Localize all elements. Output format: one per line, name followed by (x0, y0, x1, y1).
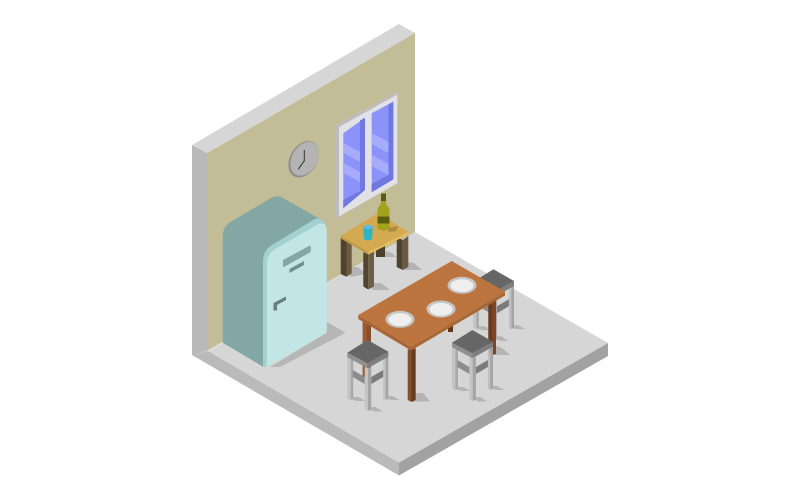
table edges (358, 315, 411, 350)
back leg (448, 320, 453, 332)
window pane: left (343, 118, 365, 208)
fridge shadow (270, 322, 346, 367)
window pane: right (372, 102, 393, 192)
front right stool (452, 330, 504, 402)
right leg (397, 236, 408, 270)
front leg (363, 251, 374, 290)
front left stool (347, 340, 400, 412)
fridge door (267, 223, 327, 367)
table top (341, 236, 368, 254)
fridge handle (274, 296, 286, 310)
side table (341, 194, 422, 290)
plate 2 (426, 300, 456, 318)
plate 1 (386, 311, 414, 328)
fridge vent (290, 261, 304, 273)
fridge rim (263, 218, 326, 367)
refrigerator (223, 196, 346, 367)
plate 3 (448, 277, 476, 294)
front leg (408, 348, 416, 402)
fridge side (223, 196, 319, 367)
back stool (473, 269, 525, 341)
fridge badge (283, 246, 311, 267)
floor slab (192, 232, 608, 476)
table top (358, 261, 505, 347)
dining table (358, 261, 510, 402)
cup (363, 225, 373, 240)
back wall (192, 24, 415, 355)
wall clock (282, 136, 325, 183)
bottle (378, 194, 398, 232)
left leg (363, 321, 371, 377)
table shadows (412, 393, 430, 402)
window (336, 92, 397, 218)
right leg (488, 298, 496, 355)
leg shadows (350, 267, 366, 277)
back leg (376, 240, 385, 257)
left leg (341, 238, 352, 277)
